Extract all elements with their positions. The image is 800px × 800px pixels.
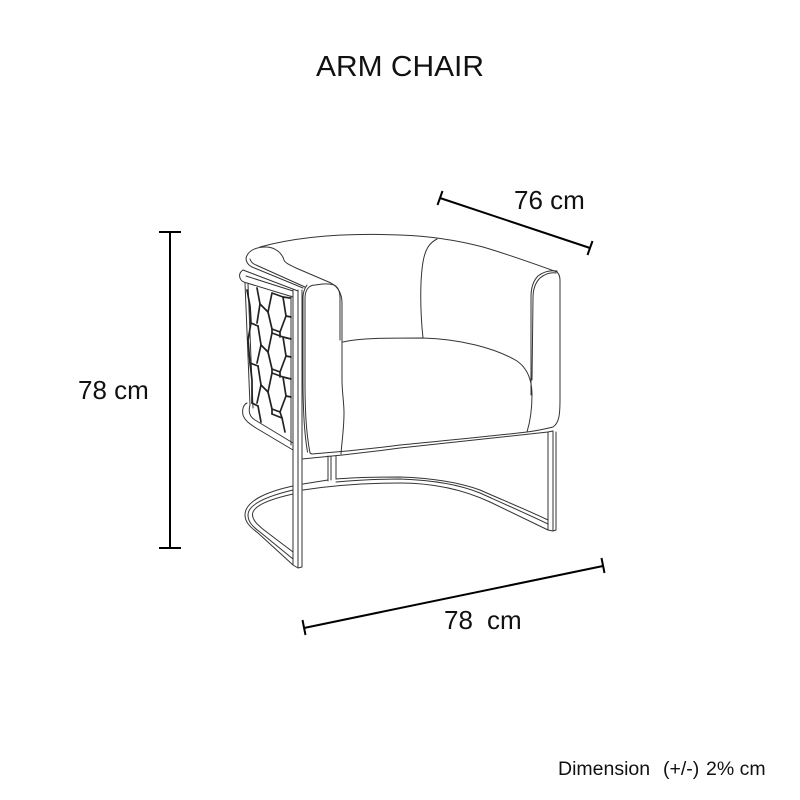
centre rear strut [328,456,336,481]
footnote: dimension tolerance: Dimension [558,758,650,780]
footnote: dimension tolerance: (+/-) [663,758,699,780]
right arm [527,271,560,432]
hexagon lattice panel [247,288,291,432]
left arm [246,247,344,454]
label: width: cm [487,605,522,635]
label: width: 78 [444,605,473,635]
dimension: width line [302,558,604,635]
back rail frame [240,270,298,450]
seat cushion [343,338,532,432]
footnote: dimension tolerance: 2% cm [706,758,766,780]
title: ARM CHAIR [316,51,484,83]
dimension: depth line [438,191,592,255]
label: height: 78 cm [78,375,149,405]
chair line drawing [240,234,560,568]
dimension: height line [159,232,181,548]
chair back [260,234,557,338]
right rear leg [548,431,556,531]
seat underside and frame [302,431,553,459]
left front post [293,290,302,568]
curved base [245,477,548,565]
label: depth: 76 cm [514,185,585,215]
